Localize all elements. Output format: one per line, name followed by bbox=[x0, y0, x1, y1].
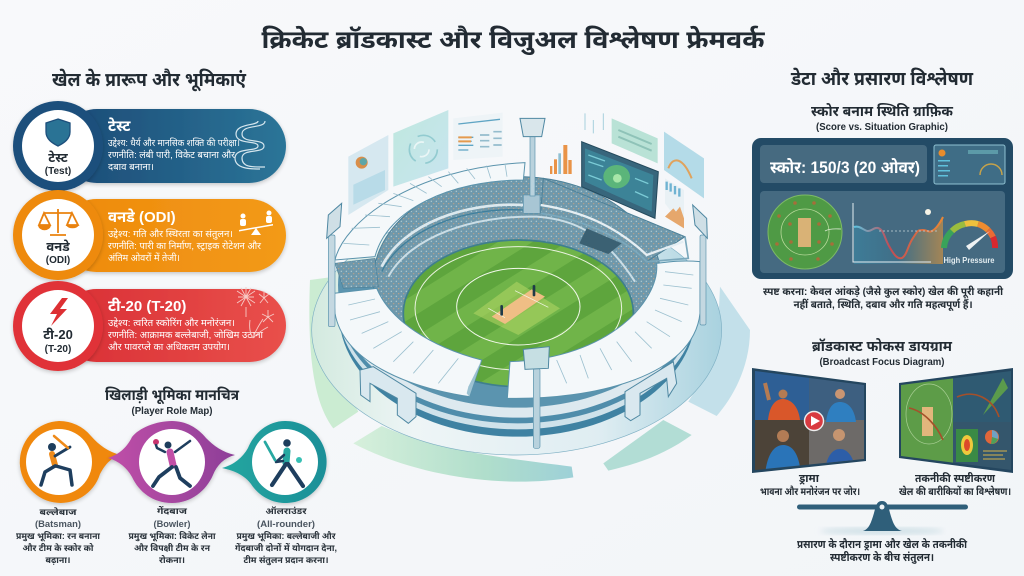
panel: left radial chart bbox=[348, 135, 388, 215]
text: technical explanation: तकनीकी स्पष्टीकरण bbox=[915, 472, 996, 485]
panel: bar table bbox=[453, 113, 503, 160]
format card: test: टेस्ट bbox=[48, 150, 69, 165]
score explanation: नहीं बताते, स्थिति, दबाव और गति महत्वपूर्ण हैं। bbox=[794, 297, 972, 312]
roof: upper left bbox=[335, 163, 525, 260]
heading: formats: खेल के प्रारूप और भूमिकाएं bbox=[52, 68, 246, 92]
panel: data and broadcast analysis: (Score vs. Situation Graphic) bbox=[816, 122, 948, 133]
icon: all-rounder figure bbox=[265, 439, 303, 486]
role: bowler bbox=[108, 421, 235, 565]
format card: T-20: (T-20) bbox=[45, 344, 71, 355]
text: drama bbox=[760, 473, 860, 498]
icon: bowler figure bbox=[153, 439, 190, 486]
format card: ODI: (ODI) bbox=[46, 255, 70, 266]
text: technical explanation bbox=[899, 472, 1011, 498]
text: drama: भावना और मनोरंजन पर जोर। bbox=[760, 485, 860, 498]
ground disc and wedges bbox=[309, 205, 750, 482]
role: all-rounder: गेंदबाजी दोनों में योगदान देना, bbox=[235, 541, 337, 553]
format card: T-20: टी-20 bbox=[43, 327, 73, 342]
score dashboard: स्कोर: 150/3 (20 ओवर) bbox=[770, 157, 920, 177]
players bbox=[500, 305, 503, 316]
format card: ODI: रणनीति: पारी का निर्माण, स्ट्राइक रोटेशन और bbox=[108, 240, 262, 252]
text: drama: ड्रामा bbox=[798, 473, 820, 485]
role: batsman bbox=[16, 421, 121, 566]
upper right stand bbox=[541, 178, 688, 262]
balance caption: प्रसारण के दौरान ड्रामा और खेल के तकनीकी bbox=[797, 537, 968, 551]
heading: broadcast focus diagram: ब्रॉडकास्ट फोकस डायग्राम bbox=[812, 338, 953, 354]
balance diagram bbox=[797, 501, 968, 534]
format card: T-20: उद्देश्य: त्वरित स्कोरिंग और मनोरंजन। bbox=[108, 317, 235, 329]
floating data panels bbox=[348, 110, 704, 228]
chart: momentum line bbox=[853, 203, 943, 264]
panel: data and broadcast analysis bbox=[752, 67, 1013, 565]
section: player role map bbox=[16, 387, 337, 566]
format card: ODI: अंतिम ओवरों में तेजी। bbox=[108, 252, 180, 264]
format card: test: (Test) bbox=[45, 166, 71, 177]
format card: T-20: और पावरप्ले का अधिकतम उपयोग। bbox=[108, 341, 230, 353]
gauge: high pressure bbox=[944, 223, 995, 265]
role: bowler: और विपक्षी टीम के रन bbox=[134, 541, 210, 553]
role: bowler: प्रमुख भूमिका: विकेट लेना bbox=[128, 529, 216, 542]
role: all-rounder bbox=[222, 421, 337, 566]
stadium body tiers bbox=[338, 275, 692, 437]
format card: test: रणनीति: लंबी पारी, विकेट बचाना और bbox=[108, 149, 236, 161]
score dashboard bbox=[752, 138, 1013, 279]
panel: formats and roles bbox=[13, 68, 337, 566]
mini dashboard bbox=[934, 145, 1005, 184]
format card: ODI: उद्देश्य: गति और स्थिरता का संतुलन। bbox=[108, 228, 233, 240]
balance caption bbox=[797, 537, 968, 565]
format card: T-20: टी-20 (T-20) bbox=[108, 298, 186, 315]
roof: lower right bbox=[507, 261, 700, 398]
role: bowler: गेंदबाज bbox=[157, 505, 188, 516]
panel: data and broadcast analysis: (Broadcast Focus Diagram) bbox=[820, 357, 944, 368]
title: क्रिकेट ब्रॉडकास्ट और विजुअल विश्लेषण फ्रेमवर्क bbox=[262, 25, 766, 55]
pitch bbox=[473, 282, 560, 335]
entrance gates bbox=[360, 362, 677, 423]
format card: test: उद्देश्य: धैर्य और मानसिक शक्ति की परीक्षा। bbox=[108, 137, 240, 149]
format card: test: टेस्ट bbox=[108, 117, 131, 135]
heading: score vs situation: स्कोर बनाम स्थिति ग्राफ़िक bbox=[811, 103, 953, 119]
score explanation: स्पष्ट करना: केवल आंकड़े (जैसे कुल स्कोर) खेल की पूरी कहानी bbox=[763, 284, 1004, 299]
screen: technical bbox=[899, 368, 1013, 473]
format card: ODI: वनडे (ODI) bbox=[108, 208, 176, 226]
format card: ODI bbox=[13, 190, 286, 280]
mini field diagram bbox=[768, 195, 842, 269]
role: batsman: और टीम के स्कोर को bbox=[22, 541, 94, 553]
role: bowler: (Bowler) bbox=[154, 519, 191, 529]
role: all-rounder: टीम संतुलन प्रदान करना। bbox=[244, 554, 328, 566]
section: player role map: (Player Role Map) bbox=[132, 406, 212, 417]
panel: right charts bbox=[612, 118, 704, 228]
scoreboard screen bbox=[582, 142, 658, 218]
chart: orange bars bbox=[550, 113, 603, 174]
role: all-rounder: प्रमुख भूमिका: बल्लेबाजी और bbox=[236, 529, 336, 542]
icon: batsman figure bbox=[41, 436, 72, 485]
icon: scales bbox=[39, 209, 78, 235]
screen: drama bbox=[752, 368, 866, 475]
icon: lightning bolt bbox=[50, 298, 68, 326]
format card: T-20: रणनीति: आक्रामक बल्लेबाजी, जोखिम उठाना bbox=[108, 329, 264, 341]
score explanation bbox=[763, 284, 1004, 312]
panel: radial display bbox=[393, 110, 448, 187]
heading: data analysis: डेटा और प्रसारण विश्लेषण bbox=[790, 67, 974, 90]
icon: winding road bbox=[235, 121, 265, 169]
icon: shield bbox=[46, 119, 70, 146]
gauge: high pressure: High Pressure bbox=[944, 256, 995, 265]
role: all-rounder: ऑलराउंडर bbox=[266, 505, 308, 516]
format card: test: दबाव बनाना। bbox=[108, 162, 154, 173]
stands crowd bbox=[335, 177, 661, 383]
cricket field bbox=[403, 240, 633, 387]
role: all-rounder: (All-rounder) bbox=[257, 519, 315, 529]
icon: seesaw bbox=[239, 210, 273, 235]
balance caption: स्पष्टीकरण के बीच संतुलन। bbox=[830, 550, 934, 565]
format card: ODI: वनडे bbox=[46, 239, 70, 254]
format card: T-20 bbox=[13, 281, 286, 371]
role: batsman: प्रमुख भूमिका: रन बनाना bbox=[16, 530, 100, 542]
icon: play button bbox=[804, 412, 824, 430]
heading: player role map: खिलाड़ी भूमिका मानचित्र bbox=[105, 387, 240, 405]
role: bowler: रोकना। bbox=[159, 554, 185, 565]
format card: test bbox=[13, 101, 286, 191]
role: batsman: (Batsman) bbox=[35, 519, 81, 529]
icon: fireworks bbox=[237, 287, 274, 338]
illustration: stadium bbox=[309, 110, 750, 482]
floodlight towers bbox=[327, 118, 707, 448]
role: batsman: बल्लेबाज bbox=[40, 505, 78, 517]
role: batsman: बढ़ाना। bbox=[46, 555, 70, 566]
roof: lower left bbox=[333, 288, 482, 397]
